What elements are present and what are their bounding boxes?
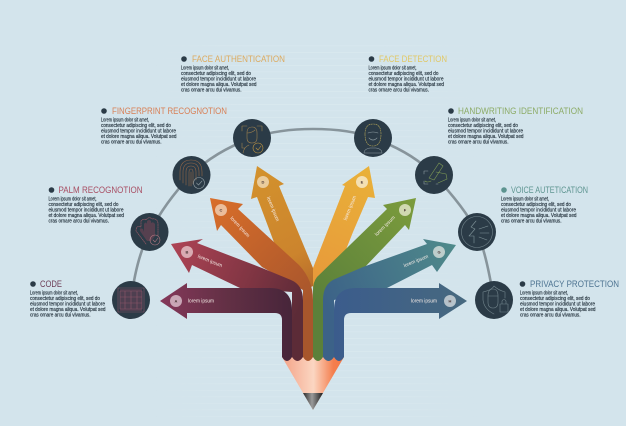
text block: palm recognotion: PALM RECOGNOTION: [58, 185, 142, 195]
text block: privacy protection: cras ornare arcu dui vivamus.: [520, 312, 580, 318]
text block: voice autetication: VOICE AUTETICATION: [511, 185, 588, 195]
text block: face detection: et dolore magna aliqua. Volutpat sed: [368, 82, 444, 88]
text block: fingerprint recognotion: [101, 106, 227, 146]
arrow D: lorem ipsum: [265, 196, 280, 222]
text block: face authentication: et dolore magna aliqua. Volutpat sed: [181, 82, 256, 88]
arrow B: B: [186, 250, 189, 254]
text block: face detection: [368, 54, 447, 94]
arrow G: lorem ipsum: [403, 254, 429, 269]
text block: code: consectetur adipiscing elit, sed do: [30, 296, 100, 302]
arrow A: [160, 283, 292, 361]
text block: privacy protection: eiusmod tempor incididunt ut labore: [520, 302, 595, 308]
text block: handwriting identification: [448, 106, 583, 146]
text block: palm recognotion: cras ornare arcu dui vivamus.: [48, 218, 109, 224]
text block: face authentication: FACE AUTHENTICATION: [192, 54, 285, 64]
arrow D: D: [262, 180, 265, 184]
text block: palm recognotion: [48, 185, 142, 224]
text block: handwriting identification: consectetur adipiscing elit, sed do: [448, 123, 518, 129]
arrow G: [323, 239, 456, 361]
text block: palm recognotion: eiusmod tempor incididunt ut labore: [48, 208, 124, 214]
arrow F: [313, 198, 416, 361]
text block: face authentication: eiusmod tempor incididunt ut labore: [181, 76, 256, 82]
text block: voice autetication: Lorem ipsum dolor sit amet,: [501, 196, 549, 202]
connecting arc: [131, 129, 494, 300]
arrow E: E: [361, 180, 364, 184]
arrow F: lorem ipsum: [374, 215, 397, 238]
text block: palm recognotion: Lorem ipsum dolor sit amet,: [48, 196, 97, 202]
text block: voice autetication: cras ornare arcu dui vivamus.: [501, 218, 562, 224]
text block: handwriting identification: HANDWRITING IDENTIFICATION: [458, 106, 583, 116]
icon: handwriting: [415, 156, 453, 194]
text block: fingerprint recognotion: cras ornare arcu dui vivamus.: [101, 140, 162, 146]
text block: voice autetication: [501, 185, 588, 224]
text block: face authentication: consectetur adipiscing elit, sed do: [181, 71, 251, 77]
text block: fingerprint recognotion: Lorem ipsum dolor sit amet,: [101, 118, 149, 124]
text block: fingerprint recognotion: consectetur adipiscing elit, sed do: [101, 123, 171, 129]
icon: voice: [458, 213, 496, 251]
text block: privacy protection: Lorem ipsum dolor sit amet,: [520, 290, 568, 296]
text block: voice autetication: et dolore magna aliqua. Volutpat sed: [501, 213, 576, 219]
arrow B: lorem ipsum: [197, 254, 223, 269]
arrow H: [334, 283, 467, 361]
text block: face authentication: [181, 54, 285, 94]
arrow A: lorem ipsum: [188, 298, 214, 304]
arrow H: H: [449, 298, 452, 304]
text block: palm recognotion: et dolore magna aliqua. Volutpat sed: [48, 213, 124, 219]
arrow C: [210, 198, 313, 361]
text block: code: CODE: [40, 279, 62, 289]
text block: code: cras ornare arcu dui vivamus.: [30, 312, 90, 318]
text block: palm recognotion: consectetur adipiscing elit, sed do: [48, 202, 118, 208]
pencil tip: [282, 357, 344, 410]
icon: face authentication: [233, 119, 271, 157]
text block: code: et dolore magna aliqua. Volutpat sed: [30, 307, 106, 313]
text block: fingerprint recognotion: FINGERPRINT RECOGNOTION: [112, 106, 227, 116]
icon: code grid: [112, 281, 150, 319]
text block: privacy protection: et dolore magna aliqua. Volutpat sed: [520, 307, 596, 313]
arrow A: A: [175, 298, 178, 304]
text block: face detection: Lorem ipsum dolor sit amet,: [368, 66, 417, 72]
text block: face authentication: Lorem ipsum dolor sit amet,: [181, 66, 229, 72]
text block: face authentication: cras ornare arcu dui vivamus.: [181, 88, 242, 94]
arrow C: C: [220, 208, 223, 212]
icon: palm: [130, 213, 168, 251]
text block: handwriting identification: et dolore magna aliqua. Volutpat sed: [448, 134, 524, 140]
text block: code: Lorem ipsum dolor sit amet,: [30, 290, 78, 296]
text block: handwriting identification: cras ornare arcu dui vivamus.: [448, 140, 508, 146]
text block: fingerprint recognotion: eiusmod tempor incididunt ut labore: [101, 128, 176, 134]
arrow G: G: [437, 250, 441, 254]
text block: privacy protection: [520, 279, 619, 318]
text block: handwriting identification: Lorem ipsum dolor sit amet,: [448, 118, 496, 124]
text block: voice autetication: consectetur adipiscing elit, sed do: [501, 202, 571, 208]
arrow H: lorem ipsum: [411, 298, 437, 304]
arrow D: [251, 166, 316, 290]
arrow C: lorem ipsum: [229, 216, 251, 239]
text block: code: [30, 279, 106, 318]
text block: face detection: eiusmod tempor incididunt ut labore: [368, 76, 444, 82]
arrow F: F: [404, 208, 407, 212]
text block: handwriting identification: eiusmod tempor incididunt ut labore: [448, 128, 523, 134]
text block: code: eiusmod tempor incididunt ut labore: [30, 302, 105, 308]
text block: privacy protection: consectetur adipiscing elit, sed do: [520, 296, 590, 302]
icon: privacy: [475, 281, 513, 319]
text block: fingerprint recognotion: et dolore magna aliqua. Volutpat sed: [101, 134, 176, 140]
arrow E: lorem ipsum: [343, 195, 358, 221]
icon: face detection: [354, 119, 392, 157]
text block: face detection: consectetur adipiscing elit, sed do: [368, 71, 438, 77]
text block: voice autetication: eiusmod tempor incididunt ut labore: [501, 208, 576, 214]
arrow E: [313, 166, 375, 295]
text block: face detection: cras ornare arcu dui vivamus.: [368, 88, 429, 94]
icon: fingerprint: [172, 156, 210, 194]
text block: face detection: FACE DETECTION: [379, 54, 447, 64]
arrow B: [171, 239, 303, 361]
